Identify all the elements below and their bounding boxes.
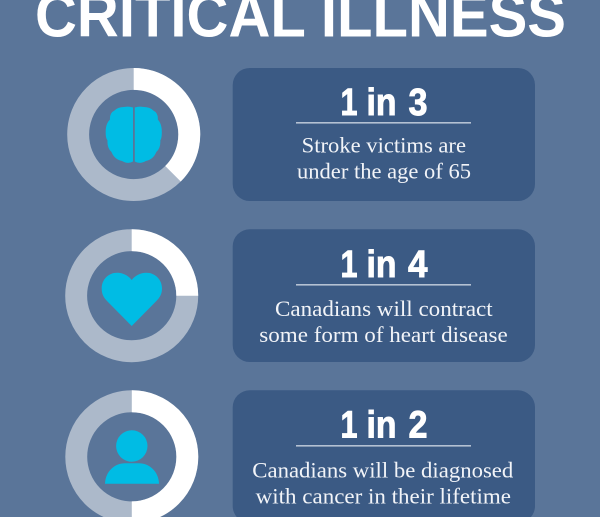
description: stroke [297, 132, 471, 183]
donut: 1 in 3 with brain icon [78, 79, 189, 190]
icon: brain [106, 107, 162, 163]
description: cancer: with cancer in their lifetime [256, 483, 511, 508]
donut: 1 in 2 with person icon [76, 401, 187, 512]
stat: 1 in 2: 2 [408, 405, 428, 447]
icon: heart [102, 273, 162, 326]
card: 1 in 2 cancer statistic [233, 390, 535, 517]
description: stroke: Stroke victims are [302, 132, 466, 157]
card: 1 in 3 stroke statistic [233, 68, 535, 201]
stat: 1 in 2 [340, 405, 428, 447]
stat: 1 in 4: in [366, 244, 396, 286]
stat: 1 in 4: 4 [408, 244, 428, 286]
stat: 1 in 4 [340, 244, 428, 286]
stat: 1 in 3: in [366, 82, 396, 124]
description: heart disease: some form of heart disease [259, 322, 508, 347]
card: 1 in 4 heart disease statistic [233, 229, 535, 362]
description: cancer: Canadians will be diagnosed [252, 457, 513, 482]
stat: 1 in 3: 1 [340, 82, 358, 124]
stat: 1 in 2: 1 [340, 405, 358, 447]
stat: 1 in 4: 1 [340, 244, 358, 286]
description: heart disease: Canadians will contract [275, 296, 493, 321]
description: heart disease [259, 296, 508, 347]
donut: 1 in 4 with heart icon [76, 240, 187, 351]
stat: 1 in 3 [340, 82, 428, 124]
description: stroke: under the age of 65 [297, 158, 471, 183]
stat: 1 in 2: in [366, 405, 396, 447]
description: cancer [252, 457, 513, 508]
icon: person [105, 430, 159, 484]
stat: 1 in 3: 3 [408, 82, 428, 124]
